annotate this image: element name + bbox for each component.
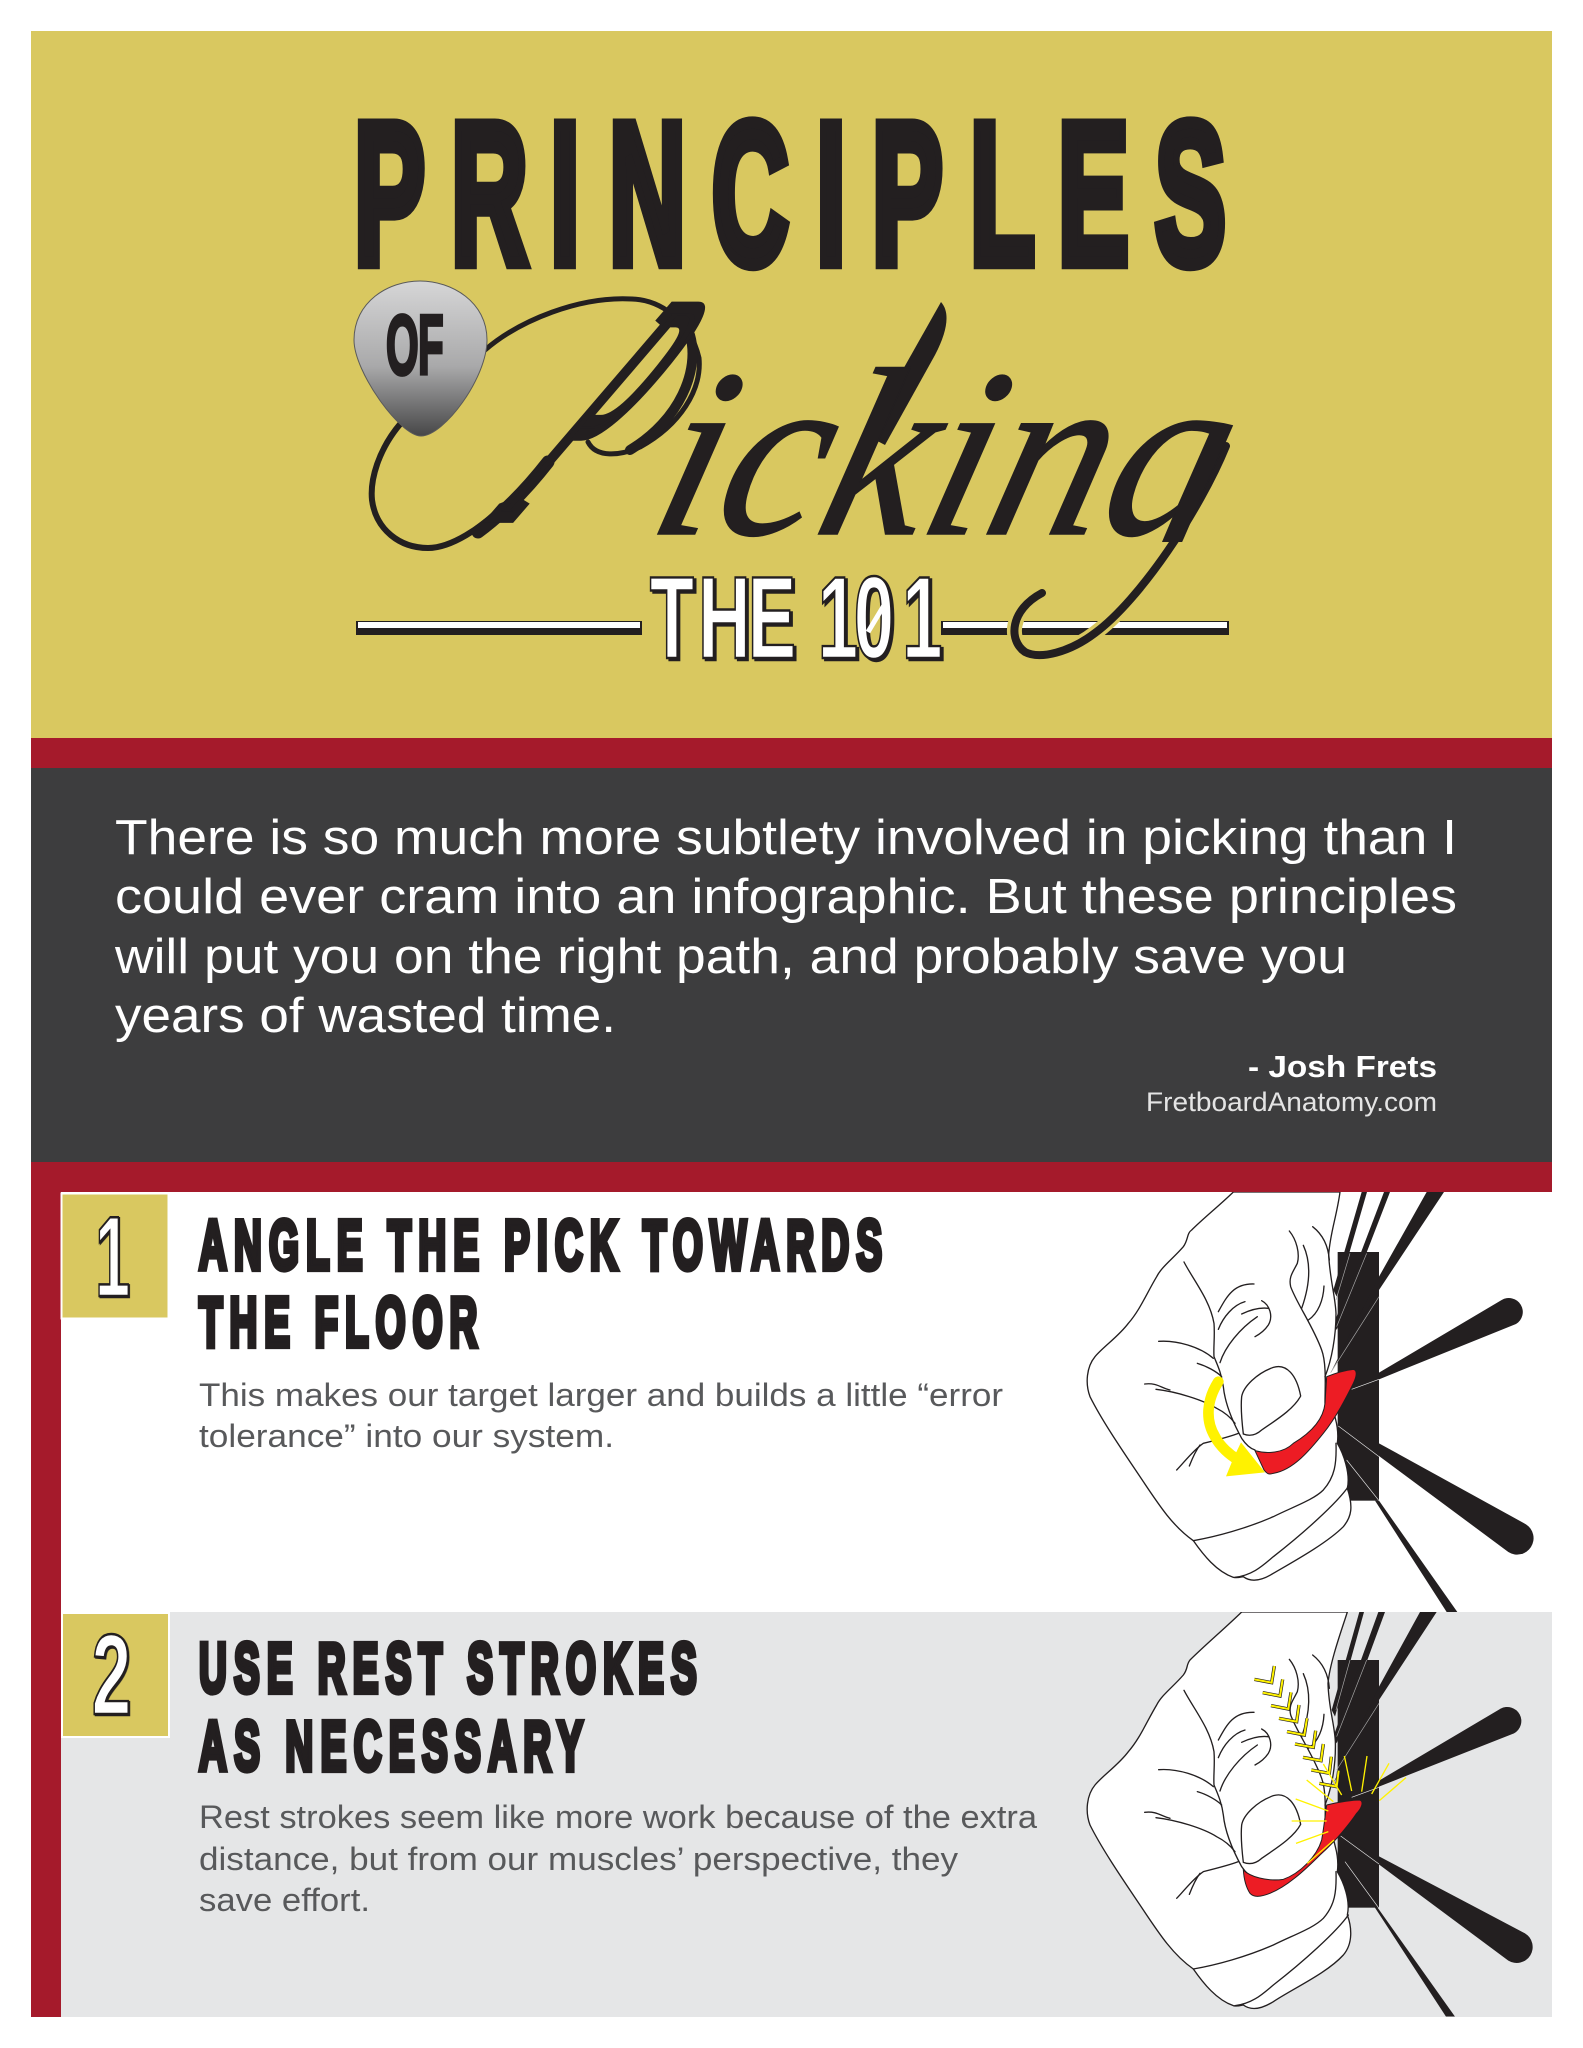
illustration: hand angling the pick xyxy=(1087,1192,1534,1612)
attribution: FretboardAnatomy.com xyxy=(1146,1087,1437,1117)
heading step 2: AS NECESSARY xyxy=(199,1707,583,1785)
icon: guitar pick with OF: OF xyxy=(386,299,444,393)
heading step 1 xyxy=(199,1206,882,1361)
yellow impact rays xyxy=(1292,1756,1406,1863)
panel: step 2 xyxy=(61,1612,1552,2017)
panel: title banner xyxy=(31,31,1552,738)
yellow arrow xyxy=(1208,1382,1265,1476)
red frame of steps xyxy=(31,1162,1552,2017)
attribution xyxy=(1146,1049,1437,1117)
yellow chevrons xyxy=(1254,1666,1339,1787)
heading step 2 xyxy=(199,1629,697,1785)
heading step 1: THE FLOOR xyxy=(199,1283,477,1361)
icon: guitar pick with OF xyxy=(354,281,487,436)
red pick xyxy=(1255,1369,1356,1474)
divider rule with bevel xyxy=(356,621,1229,635)
script word: Picking xyxy=(368,296,1234,660)
intro paragraph xyxy=(114,810,1457,1043)
red pick xyxy=(1243,1800,1362,1896)
body step 1: This makes our target larger and builds a little “error xyxy=(199,1377,1003,1413)
body step 2: Rest strokes seem like more work because of the extra xyxy=(199,1799,1037,1835)
number badge 2: 2 xyxy=(92,1612,131,1739)
body step 2: save effort. xyxy=(199,1882,370,1918)
red band above intro xyxy=(31,738,1552,768)
finger lines xyxy=(1145,1227,1348,1577)
heading step 2: USE REST STROKES xyxy=(199,1629,697,1707)
panel: step 1 xyxy=(62,1192,1534,1612)
script word: Picking: P xyxy=(432,233,777,587)
finger lines xyxy=(1145,1655,1348,2006)
intro paragraph: years of wasted time. xyxy=(115,988,616,1043)
intro paragraph: There is so much more subtlety involved in picking than I xyxy=(115,810,1457,865)
strings and bridge xyxy=(1332,1612,1533,2017)
intro paragraph: will put you on the right path, and probably save you xyxy=(114,929,1347,984)
body step 1: tolerance” into our system. xyxy=(199,1418,614,1454)
heading step 1: ANGLE THE PICK TOWARDS xyxy=(199,1206,882,1284)
strings and bridge xyxy=(1331,1192,1534,1612)
script word: Picking: icking xyxy=(631,320,1267,586)
intro paragraph: could ever cram into an infographic. But these principles xyxy=(115,869,1457,924)
panel: intro quote xyxy=(31,768,1552,1162)
fist xyxy=(1087,1192,1351,1580)
body step 2 xyxy=(199,1799,1037,1918)
number badge 1 xyxy=(62,1194,168,1321)
attribution: - Josh Frets xyxy=(1248,1049,1437,1084)
number badge 1: 1 xyxy=(95,1194,130,1321)
body step 2: distance, but from our muscles’ perspective, they xyxy=(199,1841,958,1877)
number badge 2 xyxy=(62,1612,169,1739)
subtitle: THE 101: THE 101 xyxy=(650,552,942,683)
title: PRINCIPLES: PRINCIPLES xyxy=(354,82,1226,307)
illustration: hand with rest stroke xyxy=(1087,1612,1533,2017)
body step 1 xyxy=(199,1377,1003,1454)
fist xyxy=(1087,1612,1351,2008)
